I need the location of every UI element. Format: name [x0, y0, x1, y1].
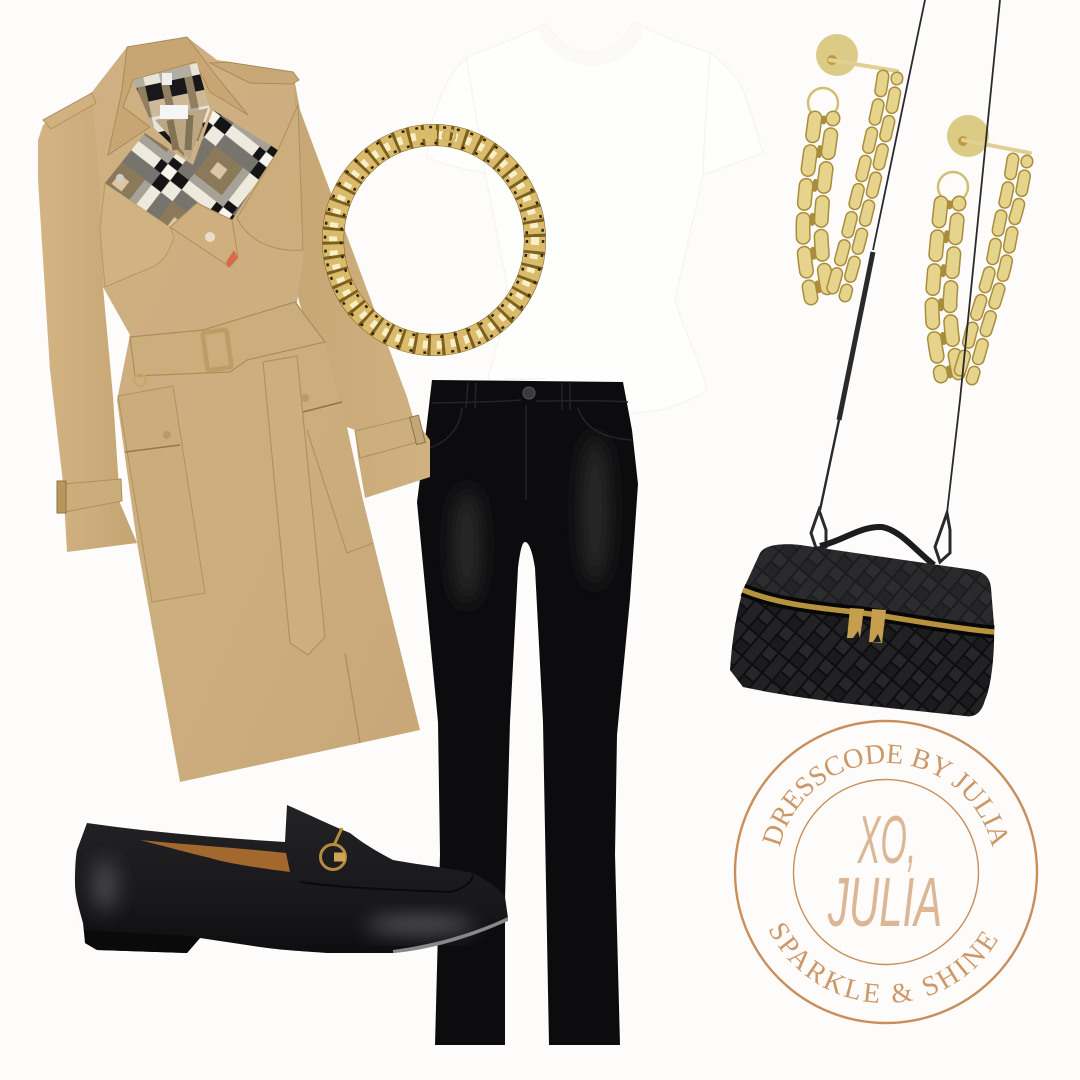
placket button	[205, 232, 215, 242]
left pocket	[118, 386, 205, 602]
shoe highlights	[93, 859, 117, 911]
bag body	[730, 544, 994, 716]
left sleeve	[38, 92, 137, 552]
belt buckle	[202, 330, 232, 370]
white t-shirt	[427, 22, 763, 413]
placket	[170, 203, 238, 267]
top ring text: DRESSCODE BY JULIA	[762, 744, 1008, 848]
lining labels	[160, 105, 188, 119]
gold horsebit	[320, 828, 346, 870]
zipper pulls	[847, 608, 864, 638]
jeans sheen	[453, 488, 481, 604]
lapel button	[116, 174, 124, 182]
red lining accent	[226, 250, 238, 268]
black leather loafer	[75, 805, 508, 953]
inner ring	[794, 780, 978, 964]
script monogram xo: XO,	[856, 802, 916, 878]
right sleeve	[260, 72, 430, 498]
coat collar	[108, 37, 248, 155]
right earring	[932, 115, 1030, 379]
bottom ring text: SPARKLE & SHINE	[769, 923, 998, 1003]
earring pair	[803, 34, 1030, 379]
belt tail	[263, 356, 325, 655]
epaulettes	[210, 62, 299, 84]
script monogram julia: JULIA	[827, 864, 942, 942]
waistband label	[505, 378, 545, 380]
right pocket	[301, 394, 373, 553]
black coated jeans	[417, 378, 638, 1045]
jeans button	[523, 387, 535, 399]
plaid lapels	[105, 110, 278, 227]
d-ring	[134, 374, 146, 386]
bag handle	[820, 527, 934, 565]
coat body	[92, 37, 420, 782]
storm flap right	[237, 105, 303, 250]
collar shading	[538, 22, 643, 65]
zipper	[743, 590, 994, 632]
gold curb chain necklace	[325, 127, 543, 353]
left cuff strap	[57, 479, 122, 513]
trench coat	[38, 37, 430, 782]
shoe lining	[140, 840, 290, 872]
bag straps	[811, 0, 1000, 562]
brand stamp	[734, 720, 1038, 1024]
outer ring	[735, 721, 1037, 1023]
plaid lining	[133, 63, 210, 162]
left earring	[803, 34, 897, 298]
right cuff strap	[355, 415, 425, 458]
necklace clasp	[417, 130, 455, 142]
storm flap left	[100, 183, 174, 287]
belt	[130, 302, 325, 376]
shoe sole	[393, 917, 508, 953]
crossbody bag	[730, 0, 1000, 716]
